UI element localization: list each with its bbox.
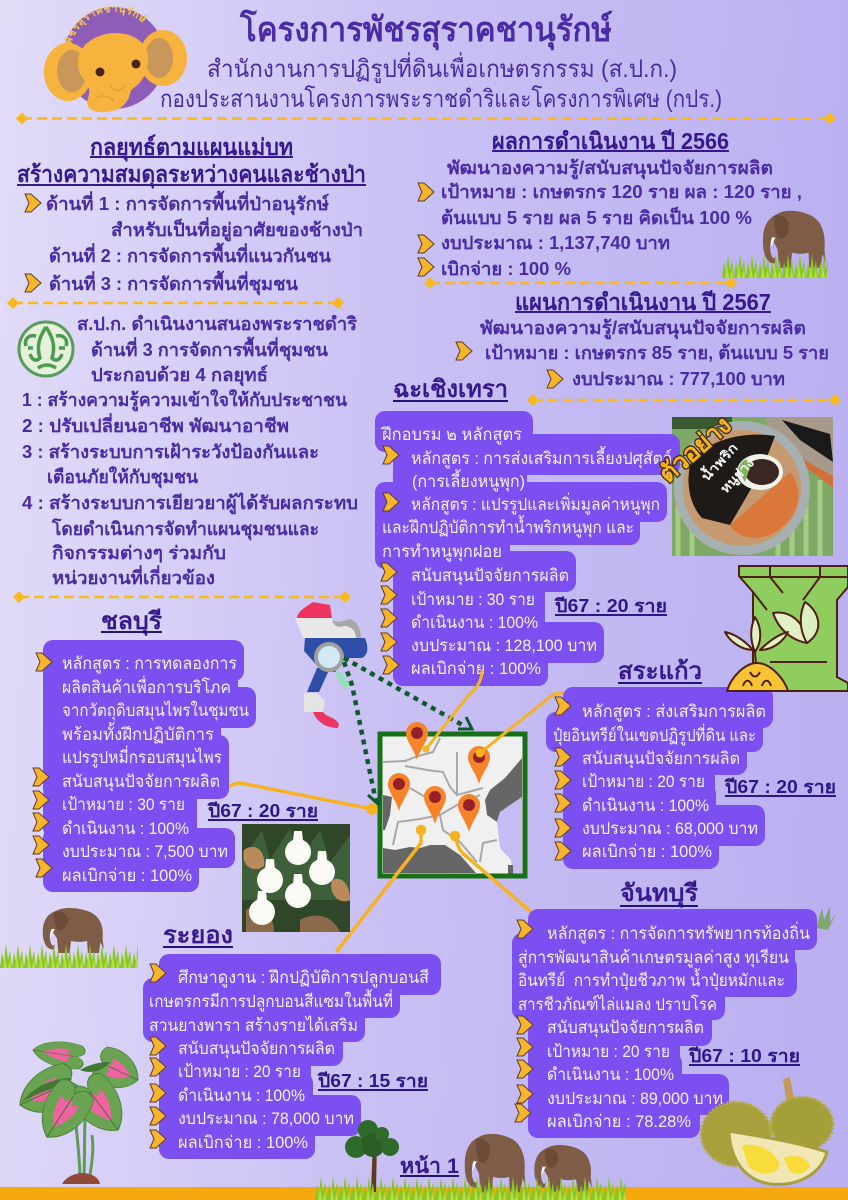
panel: Chonburi: งบประมาณ : 7,500 บาท <box>62 842 228 861</box>
panel background <box>43 640 256 892</box>
icon: elephants on grass bottom <box>315 1134 626 1200</box>
panel: plan 2567: เป้าหมาย : เกษตรกร 85 ราย, ต้นแบบ 5 ราย <box>485 343 829 363</box>
label: Chachoengsao 2567 target: ปี67 : 20 ราย <box>554 596 667 616</box>
panel: Chanthaburi: อินทรีย์ การทำปุ๋ยชีวภาพ น้ำปุ๋ยหมักและ <box>518 968 785 991</box>
panel: Chachoengsao: และฝึกปฏิบัติการทำน้ำพริกหนูพุก และ <box>382 515 634 538</box>
panel: Chonburi: พร้อมทั้งฝึกปฏิบัติการ <box>62 722 214 744</box>
panel: results 2566 <box>418 128 802 279</box>
panel: Chachoengsao: การทำหนูพุกฝอย <box>382 542 502 562</box>
panel: Sa Kaeo: หลักสูตร : ส่งเสริมการผลิต <box>582 702 766 722</box>
connector: Chonburi <box>218 783 376 813</box>
page number: หน้า 1 <box>400 1154 459 1178</box>
panel: Rayong: ดำเนินงาน : 100% <box>178 1086 305 1105</box>
text block: royal initiative strategies: 3 : สร้างระบบการเฝ้าระวังป้องกันและ <box>22 442 319 462</box>
photo: chili paste product <box>672 417 833 556</box>
label: Rayong 2567 target: ปี67 : 15 ราย <box>317 1071 428 1091</box>
icon: ALRO seal <box>19 322 73 376</box>
text block: royal initiative strategies: โดยดำเนินการจัดทำแผนชุมชนและ <box>51 518 319 541</box>
panel background <box>143 954 441 1159</box>
panel: Chanthaburi: งบประมาณ : 89,000 บาท <box>547 1089 723 1108</box>
panel: Chonburi <box>33 640 256 892</box>
text block: royal initiative strategies: ส.ป.ก. ดำเนินงานสนองพระราชดำริ <box>77 314 357 334</box>
logo: elephant emblem <box>44 6 187 112</box>
panel: Chanthaburi: ผลเบิกจ่าย : 78.28% <box>547 1112 691 1131</box>
logo: elephant emblem: พัชรสุราคชานุรักษ์ <box>64 6 149 44</box>
connector: Sa Kaeo <box>477 693 564 756</box>
panel: Rayong: ผลเบิกจ่าย : 100% <box>178 1133 308 1152</box>
heading: Sa Kaeo: สระแก้ว <box>618 658 702 685</box>
icon: Thailand map with magnifier <box>295 602 367 728</box>
panel: Chonburi: ผลเบิกจ่าย : 100% <box>62 866 192 885</box>
text block: strategy aspects: ด้านที่ 1 : การจัดการพื้นที่ป่าอนุรักษ์ <box>46 190 329 216</box>
panel background <box>546 687 773 869</box>
text block: royal initiative strategies: 2 : ปรับเปลี่ยนอาชีพ พัฒนาอาชีพ <box>22 413 289 436</box>
label: Sa Kaeo 2567 target: ปี67 : 20 ราย <box>724 777 836 797</box>
panel background <box>375 411 680 686</box>
heading: Chonburi: ชลบุรี <box>101 608 162 637</box>
heading: Chachoengsao: ฉะเชิงเทรา <box>393 376 508 403</box>
panel: Chachoengsao: ฝึกอบรม ๒ หลักสูตร <box>380 425 522 445</box>
panel: Chanthaburi: สู่การพัฒนาสินค้าเกษตรมูลค่าสูง ทุเรียน <box>518 948 789 968</box>
label: Chonburi 2567 target: ปี67 : 20 ราย <box>207 801 318 821</box>
text block: royal initiative strategies: เตือนภัยให้กับชุมชน <box>47 466 199 489</box>
arrow: dotted link to map top <box>344 658 472 729</box>
panel: Rayong: เกษตรกรมีการปลูกบอนสีแซมในพื้นที่ <box>149 989 393 1012</box>
icon: caladium plant <box>11 1037 146 1184</box>
panel: Chachoengsao: (การเลี้ยงหนูพุก) <box>412 469 525 492</box>
panel: Chonburi: ดำเนินงาน : 100% <box>62 819 189 838</box>
panel: plan 2567 <box>456 289 829 389</box>
panel: results 2566: เบิกจ่าย : 100 % <box>441 259 571 279</box>
title: โครงการพัชรสุราคชานุรักษ์ <box>239 9 613 51</box>
map: eastern provinces <box>380 722 525 876</box>
panel: Chanthaburi: ดำเนินงาน : 100% <box>547 1065 674 1084</box>
panel: Rayong: เป้าหมาย : 20 ราย <box>178 1062 301 1081</box>
text block: royal initiative strategies: ด้านที่ 3 การจัดการพื้นที่ชุมชน <box>91 336 329 362</box>
panel: results 2566: งบประมาณ : 1,137,740 บาท <box>441 233 670 253</box>
panel: Rayong: สวนยางพารา สร้างรายได้เสริม <box>149 1015 358 1035</box>
arrow: dotted link to map left <box>344 662 381 804</box>
text block: strategy aspects <box>25 190 363 296</box>
heading: master plan strategy: กลยุทธ์ตามแผนแม่บท <box>90 134 293 162</box>
icon: arrow aspect 1 <box>25 194 41 212</box>
icon: fertilizer bag with plant <box>725 566 848 691</box>
panel: Rayong: ศึกษาดูงาน : ฝึกปฏิบัติการปลูกบอนสี <box>178 968 430 988</box>
heading: master plan strategy: สร้างความสมดุลระหว่างคนและช้างป่า <box>17 161 366 189</box>
panel: Chanthaburi: สารชีวภัณฑ์ไล่แมลง ปราบโรค <box>518 994 717 1014</box>
icon: durian <box>701 1077 833 1184</box>
heading: Rayong: ระยอง <box>163 922 233 949</box>
text block: royal initiative strategies <box>22 314 358 588</box>
panel: results 2566: พัฒนาองความรู้/สนับสนุนปัจจัยการผลิต <box>447 158 773 180</box>
panel: Sa Kaeo: เป้าหมาย : 20 ราย <box>582 772 705 791</box>
photo: chili paste product: หนูย่าง <box>717 455 758 497</box>
icon: elephant on grass top right <box>722 211 828 278</box>
icon: small tree <box>345 1120 399 1192</box>
panel: Chonburi: สนับสนุนปัจจัยการผลิต <box>62 772 220 792</box>
callout: sample stamp: ตัวอย่าง <box>654 411 737 489</box>
panel: Chachoengsao <box>375 411 680 686</box>
heading: Chanthaburi: จันทบุรี <box>620 880 698 909</box>
photo: herbal compress balls <box>242 824 350 932</box>
panel: Chachoengsao: งบประมาณ : 128,100 บาท <box>411 636 597 655</box>
panel: Chonburi: ผลิตสินค้าเพื่อการบริโภค <box>62 675 231 697</box>
text block: royal initiative strategies: 1 : สร้างความรู้ความเข้าใจให้กับประชาชน <box>22 389 348 412</box>
panel: Rayong <box>143 954 441 1159</box>
panel: results 2566: เป้าหมาย : เกษตรกร 120 ราย ผล : 120 ราย , <box>441 182 802 202</box>
text block: royal initiative strategies: หน่วยงานที่เกี่ยวข้อง <box>52 565 215 588</box>
text block: royal initiative strategies: กิจกรรมต่างๆ ร่วมกับ <box>52 543 226 563</box>
panel: Chonburi: เป้าหมาย : 30 ราย <box>62 795 185 814</box>
panel: Rayong: งบประมาณ : 78,000 บาท <box>178 1109 354 1128</box>
panel: Sa Kaeo: ผลเบิกจ่าย : 100% <box>582 842 712 861</box>
connector: Chachoengsao <box>424 671 482 751</box>
panel: Chachoengsao: หลักสูตร : การส่งเสริมการเลี้ยงปศุสัตว์ <box>411 446 672 469</box>
panel: Chanthaburi: สนับสนุนปัจจัยการผลิต <box>547 1018 704 1038</box>
panel: Chonburi: หลักสูตร : การทดลองการ <box>62 654 237 674</box>
heading: results 2566: ผลการดำเนินงาน ปี 2566 <box>492 128 729 154</box>
icon: elephant on grass left <box>0 908 138 968</box>
icon: arrow aspect 3 <box>25 274 41 292</box>
subtitle: ALRO: สำนักงานการปฏิรูปที่ดินเพื่อเกษตรกรรม (ส.ป.ก.) <box>207 52 677 84</box>
text block: royal initiative strategies: ประกอบด้วย 4 กลยุทธ์ <box>91 364 268 387</box>
panel: Chachoengsao: ผลเบิกจ่าย : 100% <box>411 659 541 678</box>
panel: Chachoengsao: สนับสนุนปัจจัยการผลิต <box>411 566 569 586</box>
panel: Chanthaburi: หลักสูตร : การจัดการทรัพยากรท้องถิ่น <box>547 921 810 944</box>
panel: Sa Kaeo: ปุ๋ยอินทรีย์ในเขตปฏิรูปที่ดิน และ <box>553 723 756 746</box>
heading: master plan strategy <box>17 134 366 189</box>
panel: Sa Kaeo: สนับสนุนปัจจัยการผลิต <box>582 749 740 769</box>
panel: Rayong: สนับสนุนปัจจัยการผลิต <box>178 1039 335 1059</box>
connector: Chanthaburi <box>452 832 531 912</box>
panel: plan 2567: พัฒนาองความรู้/สนับสนุนปัจจัยการผลิต <box>480 318 806 340</box>
panel: Chachoengsao: หลักสูตร : แปรรูปและเพิ่มมูลค่าหนูพุก <box>411 492 660 515</box>
panel: Chanthaburi: เป้าหมาย : 20 ราย <box>547 1042 670 1061</box>
panel: Sa Kaeo <box>546 687 773 869</box>
bottom orange bar <box>0 1187 848 1200</box>
panel background <box>512 909 817 1138</box>
panel: Chachoengsao: ดำเนินงาน : 100% <box>411 613 538 632</box>
connector: Rayong <box>337 826 424 951</box>
panel: Chonburi: จากวัตถุดิบสมุนไพรในชุมชน <box>62 700 249 721</box>
label: Chanthaburi 2567 target: ปี67 : 10 ราย <box>688 1046 800 1066</box>
icon: small grass tuft <box>816 906 836 930</box>
panel: results 2566: ต้นแบบ 5 ราย ผล 5 ราย คิดเป็น 100 % <box>441 206 752 228</box>
text block: strategy aspects: ด้านที่ 3 : การจัดการพื้นที่ชุมชน <box>49 270 299 296</box>
panel: Chachoengsao: เป้าหมาย : 30 ราย <box>411 590 535 609</box>
panel: Sa Kaeo: งบประมาณ : 68,000 บาท <box>582 819 758 838</box>
subtitle: division: กองประสานงานโครงการพระราชดำริและโครงการพิเศษ (กปร.) <box>160 85 722 113</box>
photo: chili paste product: น้ำพริก <box>696 438 741 484</box>
text block: strategy aspects: ด้านที่ 2 : การจัดการพื้นที่แนวกันชน <box>49 242 332 266</box>
panel: Chanthaburi <box>512 909 817 1138</box>
text block: strategy aspects: สำหรับเป็นที่อยู่อาศัยของช้างป่า <box>111 217 363 242</box>
icon: pins <box>388 722 490 832</box>
text block: royal initiative strategies: 4 : สร้างระบบการเยียวยาผู้ได้รับผลกระทบ <box>22 492 358 515</box>
panel: Sa Kaeo: ดำเนินงาน : 100% <box>582 796 709 815</box>
heading: plan 2567: แผนการดำเนินงาน ปี 2567 <box>515 289 771 315</box>
panel: plan 2567: งบประมาณ : 777,100 บาท <box>572 369 785 389</box>
panel: Chonburi: แปรรูปหมี่กรอบสมุนไพร <box>62 745 222 768</box>
